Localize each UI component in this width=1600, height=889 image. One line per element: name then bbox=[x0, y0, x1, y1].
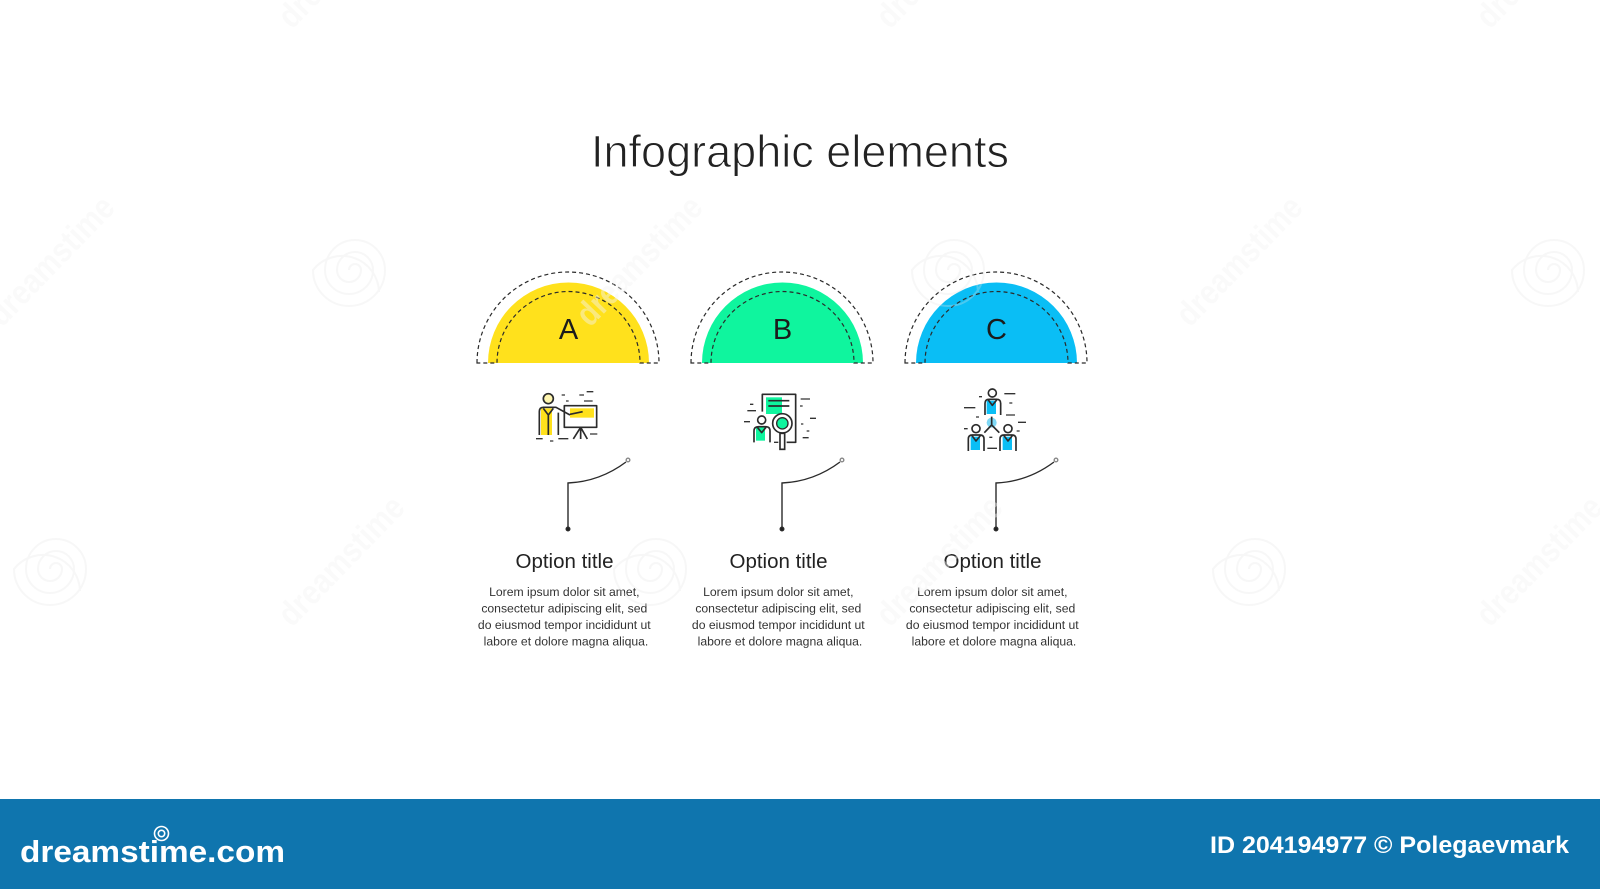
letter A: A bbox=[559, 314, 579, 346]
connector line C bbox=[994, 458, 1058, 531]
icon: document and magnifier bbox=[744, 394, 816, 449]
icon: logo spiral bbox=[154, 826, 168, 840]
option title A: Option title bbox=[516, 550, 614, 573]
watermark overlay: dreamstime bbox=[1168, 188, 1310, 334]
description A: Lorem ipsum dolor sit amet, bbox=[489, 585, 639, 599]
logo wordmark: dreamstime.com bbox=[20, 834, 285, 869]
icon: team hierarchy bbox=[964, 389, 1026, 451]
watermark overlay: dreamstime bbox=[568, 188, 710, 334]
description A: labore et dolore magna aliqua. bbox=[484, 634, 648, 648]
panel: option A bbox=[477, 272, 659, 648]
description B: consectetur adipiscing elit, sed bbox=[695, 602, 861, 616]
option title C: Option title bbox=[944, 550, 1042, 573]
description C: labore et dolore magna aliqua. bbox=[912, 634, 1076, 648]
semicircle C bbox=[905, 272, 1087, 363]
image id and credit: ID 204194977 © Polegaevmark bbox=[1210, 832, 1569, 859]
connector line B bbox=[780, 458, 844, 531]
description B: do eiusmod tempor incididunt ut bbox=[692, 618, 865, 632]
icon: presenter at board bbox=[536, 392, 597, 441]
description A: consectetur adipiscing elit, sed bbox=[481, 602, 647, 616]
panel: option C bbox=[905, 272, 1087, 648]
footer bar bbox=[0, 799, 1600, 889]
watermark overlay: dreamstime bbox=[868, 488, 1010, 634]
letter B: B bbox=[773, 314, 792, 346]
description B: Lorem ipsum dolor sit amet, bbox=[703, 585, 853, 599]
watermark overlay: dreamstime bbox=[270, 488, 412, 634]
description C: consectetur adipiscing elit, sed bbox=[909, 602, 1075, 616]
description C: do eiusmod tempor incididunt ut bbox=[906, 618, 1079, 632]
description A: do eiusmod tempor incididunt ut bbox=[478, 618, 651, 632]
title: Infographic elements bbox=[591, 126, 1009, 177]
semicircle B bbox=[691, 272, 873, 363]
letter C: C bbox=[986, 314, 1007, 346]
option title B: Option title bbox=[730, 550, 828, 573]
watermark overlay bbox=[0, 0, 1600, 634]
panel: option B bbox=[691, 272, 873, 648]
description C: Lorem ipsum dolor sit amet, bbox=[917, 585, 1067, 599]
connector line A bbox=[566, 458, 630, 531]
semicircle A bbox=[477, 272, 659, 363]
description B: labore et dolore magna aliqua. bbox=[698, 634, 862, 648]
